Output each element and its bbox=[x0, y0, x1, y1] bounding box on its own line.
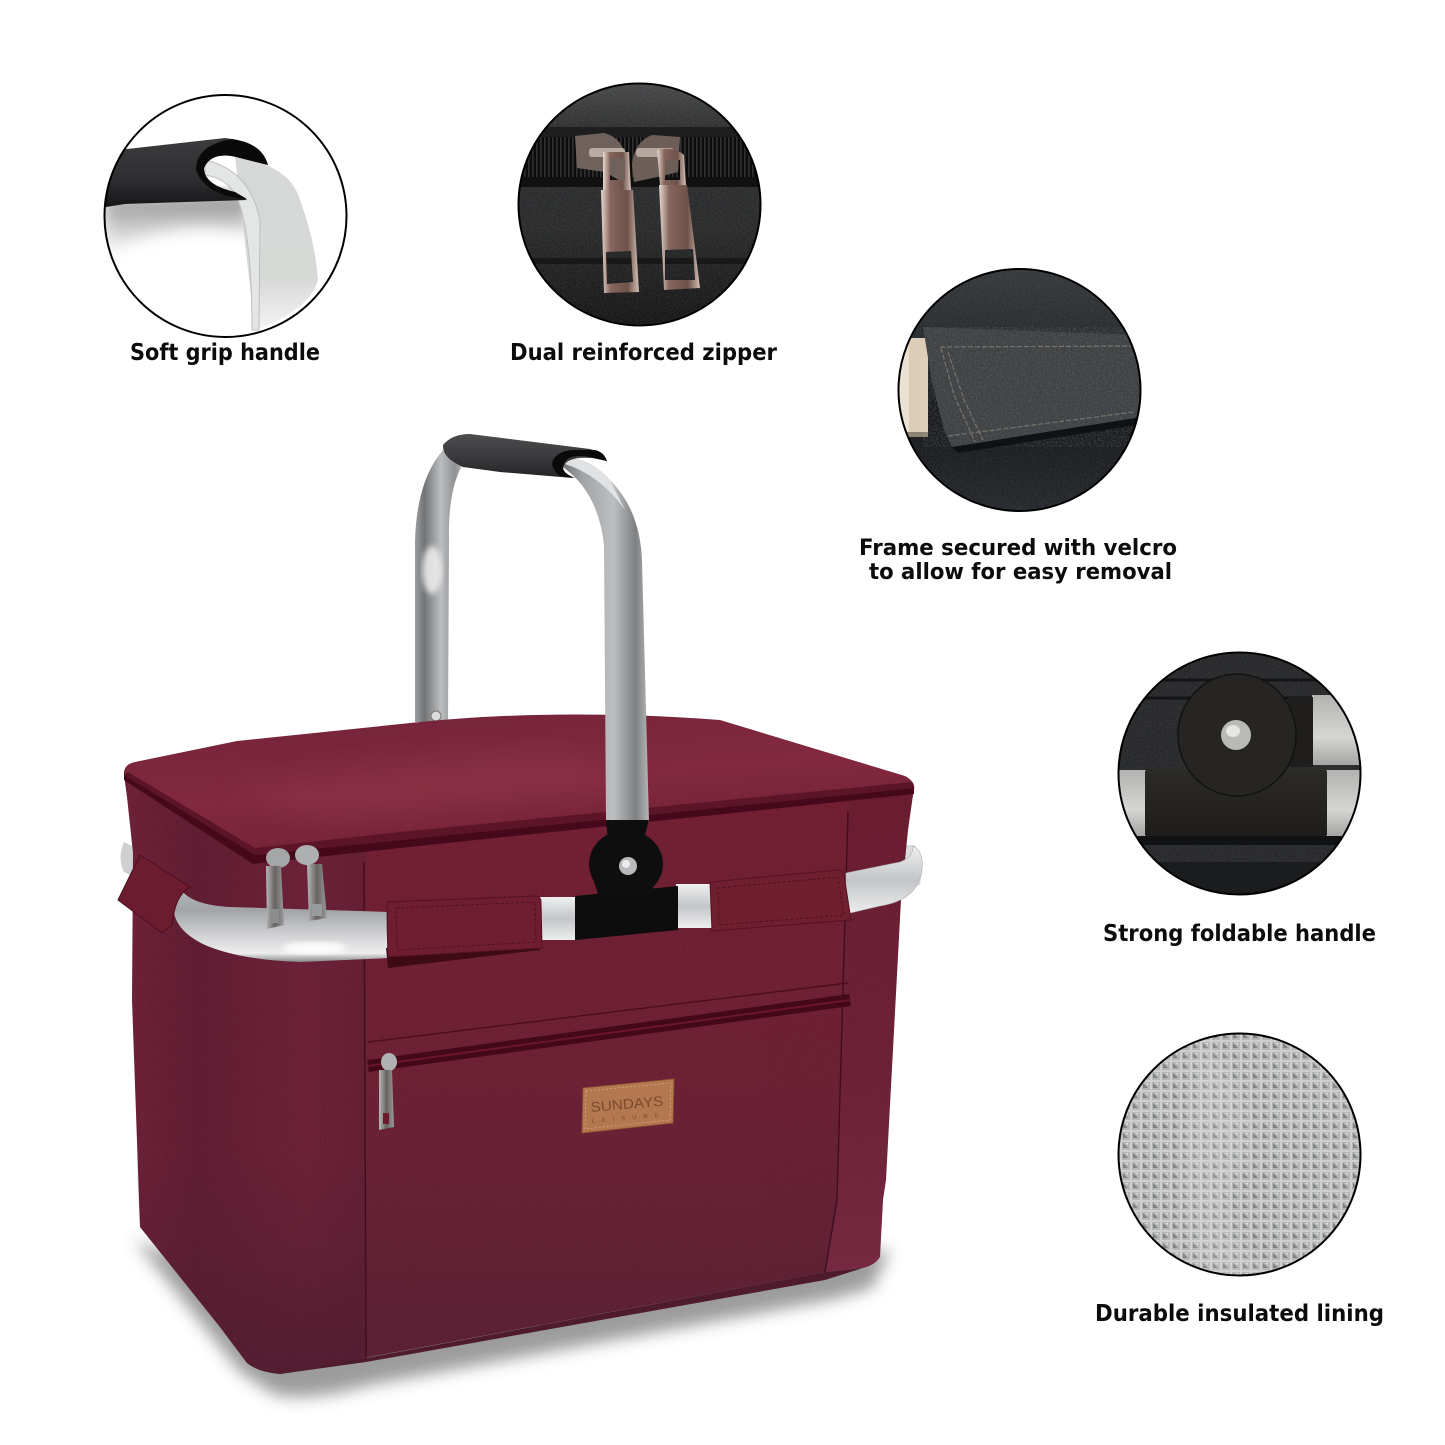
pocket seam bbox=[368, 983, 848, 1042]
velcro strap right bbox=[710, 870, 851, 931]
label: frame secured with velcro: Frame secured with velcro bbox=[859, 536, 1177, 561]
hinge bracket bbox=[575, 820, 678, 940]
label: frame secured with velcro bbox=[859, 536, 1177, 585]
label: dual reinforced zipper: Dual reinforced zipper bbox=[510, 340, 778, 366]
rim highlight bbox=[283, 942, 347, 954]
detail: soft grip handle bbox=[100, 90, 350, 340]
rear leg highlight bbox=[422, 546, 442, 594]
detail: durable insulated lining bbox=[1118, 1033, 1362, 1277]
left side lower shading bbox=[136, 1150, 366, 1374]
label: strong foldable handle: Strong foldable handle bbox=[1103, 921, 1376, 947]
aluminium rim right bbox=[846, 846, 922, 914]
handle rear leg bbox=[415, 450, 462, 722]
pocket zipper pull bbox=[379, 1053, 397, 1130]
aluminium rim left bbox=[173, 888, 389, 962]
velcro strap left bbox=[386, 896, 542, 968]
detail: dual reinforced zipper bbox=[518, 83, 762, 327]
fabric texture bbox=[120, 710, 920, 1380]
bag left side bbox=[124, 775, 367, 1374]
corner seams bbox=[364, 812, 848, 1358]
lid top bbox=[124, 714, 914, 860]
lid zipper band bbox=[124, 773, 914, 864]
rivet bbox=[431, 711, 441, 721]
product photo: burgundy picnic basket bbox=[118, 434, 922, 1397]
bottom piping bbox=[280, 1268, 863, 1374]
detail: strong foldable handle bbox=[1118, 652, 1362, 902]
brand patch bbox=[582, 1079, 674, 1133]
velcro strap side bbox=[118, 855, 190, 933]
label: durable insulated lining: Durable insulated lining bbox=[1095, 1301, 1384, 1327]
lid zipper pulls bbox=[266, 845, 327, 929]
back rim segment bbox=[120, 842, 140, 880]
aluminium rim centre bbox=[538, 897, 576, 940]
ground shadow bbox=[135, 1240, 890, 1397]
brand patch: SUNDAYS bbox=[590, 1093, 664, 1115]
bag front panel bbox=[364, 795, 848, 1358]
detail: frame secured with velcro bbox=[897, 268, 1142, 512]
soft grip bbox=[443, 434, 607, 478]
label: frame secured with velcro: to allow for easy removal bbox=[869, 560, 1172, 585]
pocket zipper bbox=[368, 1000, 850, 1066]
handle front leg bbox=[560, 458, 649, 822]
bag right side bbox=[825, 788, 914, 1272]
lid highlight bbox=[230, 745, 640, 825]
brand patch: LEISURE bbox=[592, 1113, 662, 1125]
label: soft grip handle: Soft grip handle bbox=[130, 340, 320, 366]
